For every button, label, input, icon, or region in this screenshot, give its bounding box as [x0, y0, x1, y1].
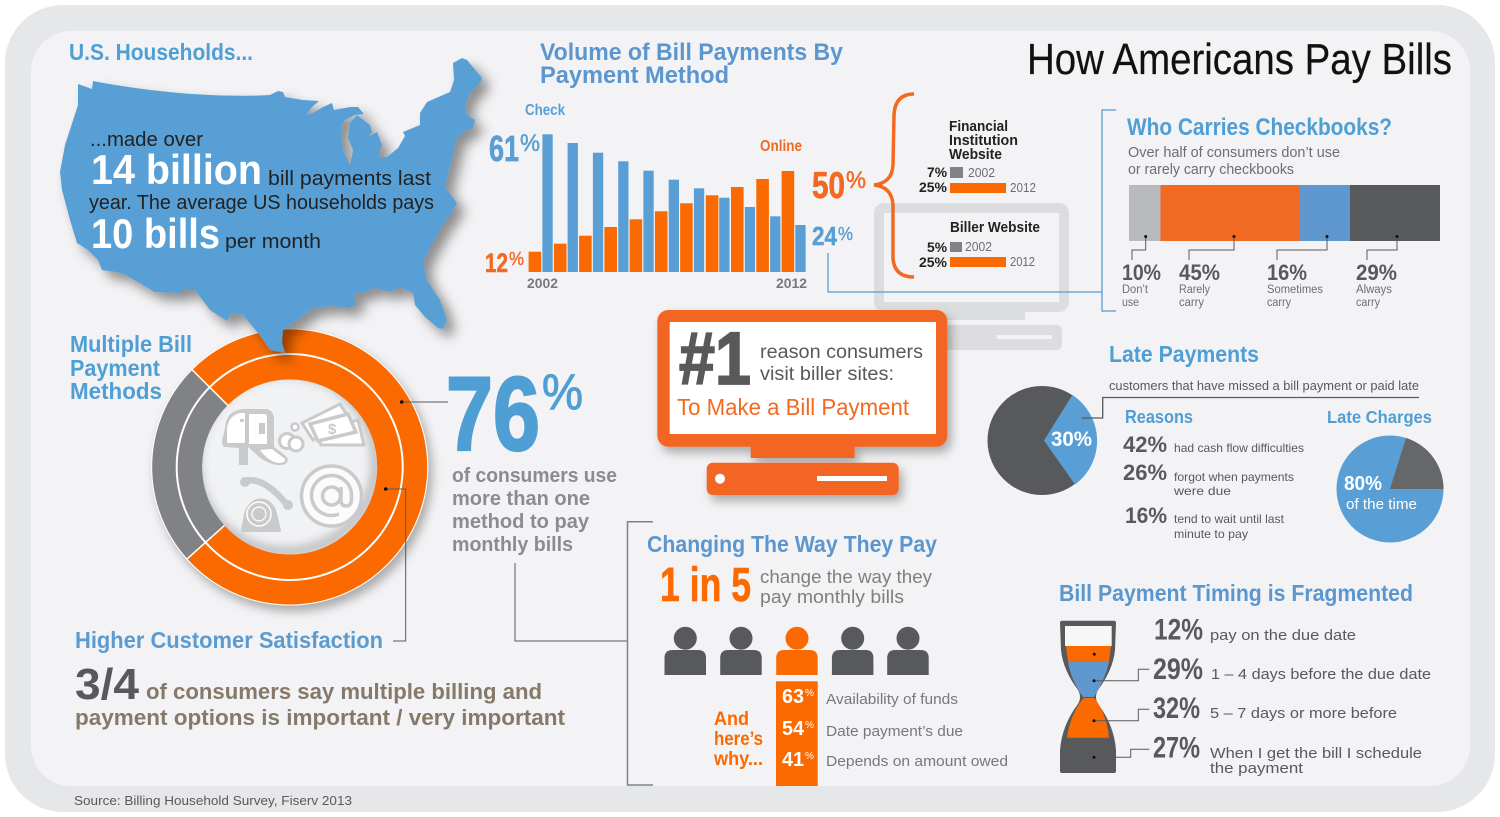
text block: reasons: had cash flow difficulties — [1174, 441, 1304, 455]
panel: number one reason monitor: visit biller sites: — [760, 364, 894, 385]
text block: and here's why: why... — [713, 748, 763, 770]
panel: biller website: 25% — [919, 254, 948, 270]
stats: timing percentages: 27% — [1153, 732, 1200, 765]
text block: timing descriptions: 1 – 4 days before the due date — [1211, 666, 1431, 683]
icon: coins and banknotes: $ — [328, 421, 337, 438]
text block: timing descriptions: pay on the due date — [1210, 627, 1356, 644]
text block: reasons — [1123, 407, 1304, 541]
bracket: changing the way they pay — [628, 522, 653, 785]
labels: checkbook percentages: carry — [1179, 297, 1204, 309]
labels: checkbook percentages: 10% — [1122, 260, 1161, 285]
heading: multiple bill payment methods — [70, 331, 192, 404]
stats: timing percentages: 12% — [1154, 613, 1203, 646]
panel: biller website: 2012 — [1010, 255, 1035, 269]
text block: reasons: tend to wait until last — [1174, 512, 1285, 526]
labels: checkbook percentages: Sometimes — [1267, 284, 1323, 296]
panel: volume of bill payments — [485, 39, 866, 291]
text block: 76 percent description: method to pay — [452, 511, 590, 533]
panel: financial institution website: 25% — [919, 179, 948, 195]
column: reasons for changing: 63 — [782, 686, 804, 708]
panel: financial institution website: Institution — [949, 133, 1018, 149]
text block: 1 in 5 description: change the way they — [760, 566, 933, 587]
connector lines: ring and satisfaction — [386, 402, 627, 641]
pie chart: late charges: of the time — [1346, 497, 1417, 513]
bar chart — [485, 102, 807, 291]
text block: map copy — [89, 129, 434, 257]
bar chart: Check — [525, 102, 565, 119]
column: reasons for changing: % — [805, 751, 814, 762]
ring chart — [152, 329, 428, 605]
stats: timing percentages — [1153, 613, 1203, 765]
text block: map copy: ...made over — [90, 129, 203, 151]
stat: 24 percent check: 24 — [812, 221, 837, 251]
panel: higher customer satisfaction: of consumers say multiple billing and — [146, 679, 542, 704]
column: reasons for changing: 41 — [782, 749, 804, 771]
text block: reasons: 16% — [1125, 503, 1167, 528]
brace — [874, 94, 914, 277]
icon: at sign — [302, 466, 362, 526]
column: reasons for changing — [776, 681, 818, 786]
text block: reasons list: Date payment’s due — [826, 723, 963, 740]
text block: timing descriptions: 5 – 7 days or more before — [1210, 705, 1397, 722]
heading: bill payment timing: Bill Payment Timing is Fragmented — [1059, 580, 1413, 606]
labels: checkbook percentages: Rarely — [1179, 284, 1210, 296]
panel: who carries checkbooks — [1122, 114, 1440, 309]
panel: bill payment timing — [1059, 580, 1431, 777]
labels: checkbook percentages: carry — [1267, 297, 1291, 309]
text block: 76 percent description: of consumers use — [452, 465, 617, 487]
icon row: five people — [664, 627, 929, 675]
stat: 76 percent: 76 — [446, 356, 540, 473]
icon: mailbox — [222, 409, 288, 465]
labels: checkbook percentages: Always — [1356, 284, 1392, 296]
text block: reasons list — [826, 691, 1008, 770]
panel: number one reason monitor: #1 — [679, 317, 751, 400]
text block: reasons: Reasons — [1125, 407, 1193, 427]
source: Source: Billing Household Survey, Fiserv 2013 — [74, 794, 352, 808]
heading: U.S. Households: U.S. Households... — [69, 39, 253, 65]
panel: number one reason monitor: To Make a Bill Payment — [677, 394, 910, 420]
leader dots — [384, 400, 404, 491]
bar chart: % — [509, 249, 524, 269]
panel: financial institution website: 7% — [927, 164, 948, 180]
panel: number one reason monitor: reason consumers — [760, 342, 923, 363]
column: reasons for changing: % — [805, 720, 814, 731]
heading: volume of bill payments: Volume of Bill Payments By — [540, 39, 844, 66]
map: United States — [60, 58, 482, 353]
panel: biller website: 5% — [927, 239, 948, 255]
labels: checkbook percentages — [1122, 260, 1397, 309]
bar chart: 12 — [485, 248, 508, 278]
column: reasons for changing: % — [805, 688, 814, 699]
panel: number one reason monitor — [657, 310, 947, 495]
stacked bar — [1129, 185, 1440, 260]
panel: biller website: Biller Website — [950, 220, 1040, 236]
heading: multiple bill payment methods: Multiple Bill — [70, 331, 192, 357]
text block: reasons: minute to pay — [1174, 527, 1248, 541]
heading: changing the way they pay: Changing The Way They Pay — [647, 531, 937, 557]
text block: reasons: 42% — [1123, 432, 1167, 457]
heading: volume of bill payments — [540, 39, 844, 89]
labels: checkbook percentages: 29% — [1356, 260, 1397, 285]
labels: checkbook percentages: Don’t — [1122, 284, 1149, 296]
panel: financial institution website: Financial — [949, 119, 1008, 135]
labels: checkbook percentages: 16% — [1267, 260, 1307, 285]
panel: biller website: 2002 — [965, 240, 992, 254]
text block: 76 percent description: more than one — [452, 488, 590, 510]
text block: timing descriptions: the payment — [1210, 760, 1304, 777]
bar chart: 2012 — [776, 276, 807, 291]
panel: late payments — [988, 341, 1444, 542]
text block: 76 percent description: monthly bills — [452, 534, 573, 556]
text block: late payments subhead: customers that have missed a bill payment or paid late — [1109, 379, 1419, 393]
background monitor — [879, 208, 1064, 350]
panel: higher customer satisfaction: Higher Customer Satisfaction — [75, 627, 383, 653]
panel: financial institution website: 2012 — [1010, 181, 1036, 195]
labels: checkbook percentages: 45% — [1179, 260, 1220, 285]
pie chart: 30 percent: 30% — [1051, 428, 1092, 451]
stat: 50 percent online: % — [846, 167, 866, 194]
connector: check to checkbooks — [828, 110, 1116, 311]
panel: higher customer satisfaction: payment options is important / very important — [75, 705, 565, 730]
panel: biller website — [919, 220, 1040, 270]
icon: rotary telephone — [240, 477, 293, 532]
pie chart: 30 percent — [988, 386, 1097, 495]
panel: financial institution website: Website — [949, 147, 1002, 163]
text block: reasons: were due — [1173, 484, 1231, 498]
pie chart: late charges: 80% — [1344, 473, 1382, 495]
text block: checkbook subhead: Over half of consumers don’t use — [1128, 144, 1340, 161]
icon: coins and banknotes — [280, 404, 364, 451]
bar chart: Online — [760, 138, 802, 155]
text block: map copy: 10 bills — [91, 210, 220, 257]
text block: 76 percent description — [452, 465, 617, 556]
text block: map copy: bill payments last — [268, 168, 431, 190]
bar chart: 2002 — [527, 276, 558, 291]
heading: multiple bill payment methods: Payment — [70, 355, 160, 381]
text block: reasons list: Availability of funds — [826, 691, 958, 708]
stat: 50 percent online: 50 — [812, 165, 845, 206]
stats: timing percentages: 32% — [1153, 692, 1200, 725]
icon: hourglass — [1060, 621, 1116, 773]
text block: timing descriptions — [1210, 627, 1431, 777]
leader lines: hourglass — [1092, 653, 1149, 759]
heading: volume of bill payments: Payment Method — [540, 62, 729, 89]
text block: and here's why: And — [714, 708, 749, 730]
stat: 76 percent — [446, 356, 617, 556]
text block: and here's why: here’s — [714, 728, 763, 750]
column: reasons for changing: 54 — [782, 718, 805, 740]
text block: reasons list: Depends on amount owed — [826, 753, 1008, 770]
panel: financial institution website — [919, 119, 1036, 195]
text block: 1 in 5 description — [760, 566, 933, 607]
panel: changing the way they pay — [647, 531, 1008, 786]
text block: map copy: year. The average US households pays — [89, 192, 434, 214]
stat: 1 in 5: 1 in 5 — [660, 559, 751, 612]
text block: checkbook subhead — [1128, 144, 1340, 178]
stat: 76 percent: % — [542, 364, 583, 420]
pie chart: late charges — [1327, 407, 1444, 542]
text block: reasons: forgot when payments — [1174, 470, 1294, 484]
heading: late payments: Late Payments — [1109, 341, 1259, 367]
bar chart: % — [520, 130, 540, 157]
stat: 24 percent check: % — [838, 224, 853, 244]
panel: financial institution website: 2002 — [968, 166, 995, 180]
labels: checkbook percentages: use — [1122, 297, 1139, 309]
panel: higher customer satisfaction — [75, 627, 565, 730]
text block: map copy: 14 billion — [91, 146, 262, 193]
heading: who carries checkbooks: Who Carries Checkbooks? — [1127, 114, 1392, 141]
labels: checkbook percentages: carry — [1356, 297, 1380, 309]
heading: multiple bill payment methods: Methods — [70, 378, 162, 404]
text block: checkbook subhead: or rarely carry checkbooks — [1128, 161, 1294, 178]
pie chart: late charges: Late Charges — [1327, 407, 1432, 427]
text block: 1 in 5 description: pay monthly bills — [760, 586, 904, 607]
text block: and here's why — [713, 708, 763, 770]
text block: map copy: per month — [225, 231, 321, 253]
text block: timing descriptions: When I get the bill I schedule — [1210, 745, 1422, 762]
text block: reasons: 26% — [1123, 460, 1167, 485]
bar chart: 61 — [489, 128, 519, 169]
stats: timing percentages: 29% — [1153, 653, 1203, 686]
panel: multiple payment methods ring — [70, 329, 428, 605]
panel: higher customer satisfaction: 3/4 — [75, 660, 140, 709]
title: How Americans Pay Bills — [1027, 35, 1452, 84]
